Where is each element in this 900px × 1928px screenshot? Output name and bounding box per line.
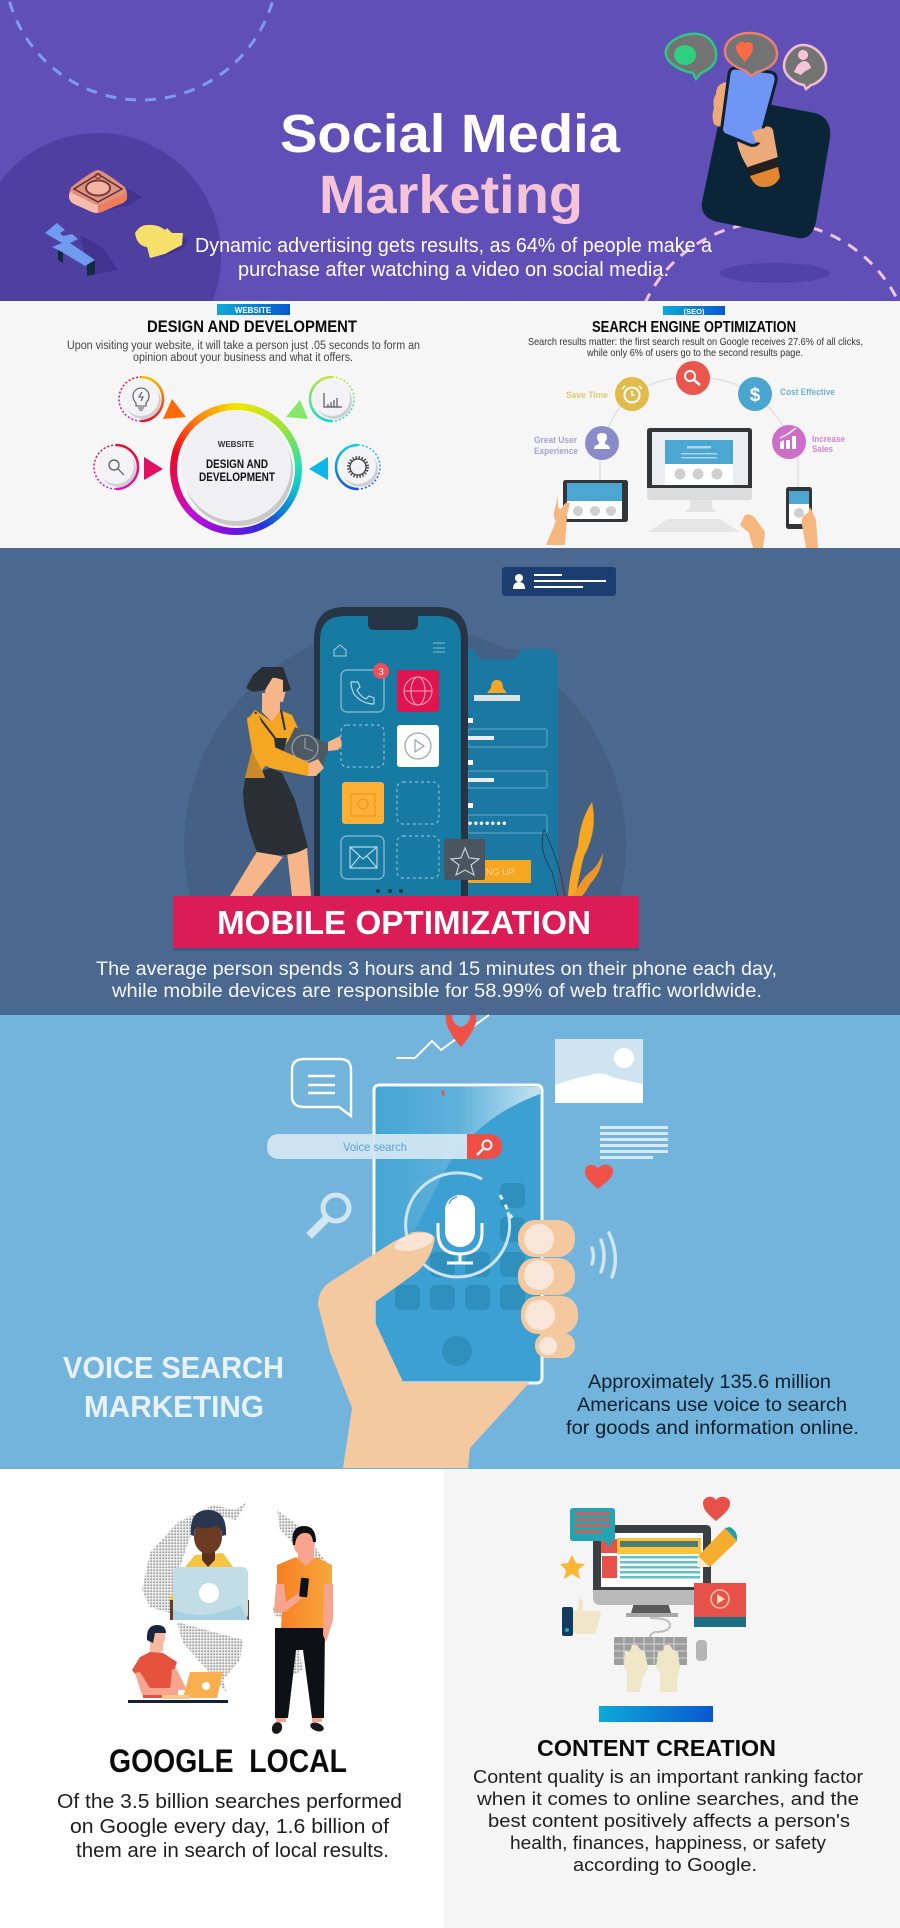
hand holding phone xyxy=(318,1220,578,1468)
chat bubble xyxy=(570,1508,615,1548)
label: cost effective: Cost Effective xyxy=(780,387,835,397)
label: increase sales: Sales xyxy=(812,444,833,454)
description: opinion about your business and what it offers. xyxy=(133,352,353,364)
icon: user badge xyxy=(585,426,619,460)
panel: design and development xyxy=(0,301,450,548)
arrow: magenta xyxy=(144,457,163,480)
tab: seo: (SEO) xyxy=(684,307,705,316)
illustration: right desk hand xyxy=(740,514,765,548)
profile badge xyxy=(502,567,616,596)
banner: mobile optimization xyxy=(173,896,639,951)
panel: search engine optimization xyxy=(450,301,900,548)
panel: content creation xyxy=(444,1469,900,1928)
panel: header xyxy=(0,0,900,301)
icon: dollar badge xyxy=(738,377,772,411)
decoration: dark circle xyxy=(0,133,221,301)
icon: magnifier node xyxy=(94,445,138,489)
woman with laptop xyxy=(169,1510,249,1620)
connector arc xyxy=(600,378,798,490)
icon: dollar badge: $ xyxy=(750,385,761,406)
description: Of the 3.5 billion searches performed xyxy=(57,1791,402,1813)
heading: DESIGN AND DEVELOPMENT xyxy=(147,317,358,336)
tab: seo xyxy=(663,306,725,316)
illustration: desktop monitor xyxy=(647,428,752,532)
app: dashed slot xyxy=(341,725,384,767)
diagram: central rainbow ring: DEVELOPMENT xyxy=(199,472,275,484)
description: according to Google. xyxy=(573,1854,757,1875)
description: when it comes to online searches, and the xyxy=(476,1788,859,1809)
heading: SEARCH ENGINE OPTIMIZATION xyxy=(592,319,796,336)
app: play xyxy=(397,725,439,767)
icon: clock badge xyxy=(615,377,649,411)
description: while mobile devices are responsible for 58.99% of web traffic worldwide. xyxy=(111,981,762,1002)
icon: magnifier xyxy=(309,1195,349,1236)
image card xyxy=(555,1039,643,1103)
description: them are in search of local results. xyxy=(76,1840,389,1862)
label: great user experience xyxy=(534,435,578,456)
video card xyxy=(694,1583,746,1627)
icon: star xyxy=(560,1555,585,1579)
monitor illustration xyxy=(593,1525,711,1617)
man with phone xyxy=(270,1526,333,1736)
back phone xyxy=(460,649,558,896)
text lines xyxy=(600,1126,668,1159)
description xyxy=(96,959,777,1002)
illustration: tablet with hand xyxy=(546,480,628,545)
description: Americans use voice to search xyxy=(577,1395,847,1416)
icon: heart xyxy=(585,1165,613,1189)
icon: instagram cube xyxy=(69,170,143,213)
description xyxy=(57,1791,402,1862)
description: health, finances, happiness, or safety xyxy=(510,1832,827,1853)
icon: yellow cloud xyxy=(135,225,188,258)
app: dashed slot xyxy=(397,782,439,824)
plant xyxy=(542,802,603,896)
description: best content positively affects a person's xyxy=(488,1810,850,1831)
app: mail xyxy=(341,836,384,879)
diagram: central rainbow ring: DESIGN AND xyxy=(206,459,268,471)
label: increase sales xyxy=(812,434,845,454)
diagram: central rainbow ring xyxy=(170,403,302,535)
arrow: green xyxy=(286,400,308,419)
keyboard and hands xyxy=(614,1618,707,1692)
icon: heart xyxy=(703,1497,730,1521)
intro text: Dynamic advertising gets results, as 64% of people make a xyxy=(195,235,713,257)
description: The average person spends 3 hours and 15 minutes on their phone each day, xyxy=(96,959,777,980)
illustration: smartphone with hand xyxy=(786,487,818,548)
line graph with pin xyxy=(396,1015,489,1058)
backdrop circle xyxy=(184,634,626,896)
app: phone xyxy=(341,663,389,712)
description: Approximately 135.6 million xyxy=(588,1372,831,1393)
description xyxy=(67,340,420,364)
front phone xyxy=(314,607,468,896)
microphone xyxy=(438,1195,482,1263)
description: on Google every day, 1.6 billion of xyxy=(70,1816,389,1838)
banner: mobile optimization: MOBILE OPTIMIZATION xyxy=(217,904,591,941)
description: Content quality is an important ranking factor xyxy=(473,1766,863,1787)
description xyxy=(473,1766,863,1875)
icon: facebook logo xyxy=(45,223,118,276)
tab: website xyxy=(217,304,290,315)
icon: sound waves xyxy=(592,1233,615,1277)
heading: CONTENT CREATION xyxy=(537,1735,776,1761)
app: shopping bag xyxy=(342,782,384,824)
panel: google local xyxy=(0,1469,444,1928)
back phone: ••••••• xyxy=(468,816,508,830)
description: for goods and information online. xyxy=(566,1418,859,1439)
back phone: NG UP xyxy=(486,867,515,877)
panel: voice search marketing xyxy=(0,1015,900,1469)
title line 2: Marketing xyxy=(319,165,583,225)
intro text xyxy=(195,235,713,281)
search bar xyxy=(267,1134,502,1159)
heading: voice search marketing: MARKETING xyxy=(84,1389,264,1424)
icon: pencil xyxy=(697,1527,737,1567)
man at laptop xyxy=(128,1625,228,1703)
intro text: purchase after watching a video on social media. xyxy=(238,259,669,281)
tab: website: WEBSITE xyxy=(235,306,272,315)
title line 1: Social Media xyxy=(280,104,621,164)
arrow: orange xyxy=(163,399,186,419)
label: save time: Save Time xyxy=(566,390,608,400)
description: Upon visiting your website, it will take a person just .05 seconds to form an xyxy=(67,340,420,352)
label: increase sales: Increase xyxy=(812,434,845,444)
label: great user experience: Great User xyxy=(534,435,577,445)
decoration: dashed arc bottom right xyxy=(644,226,897,301)
icon: magnifier badge xyxy=(676,361,710,395)
decoration: dashed arc top left xyxy=(4,0,278,100)
star tile xyxy=(444,839,485,880)
description xyxy=(566,1372,859,1439)
icon: thumbs up xyxy=(562,1599,601,1636)
heading: GOOGLE LOCAL xyxy=(109,1743,347,1779)
dotted globe xyxy=(142,1502,333,1693)
search bar: Voice search xyxy=(343,1140,407,1154)
diagram: central rainbow ring: WEBSITE xyxy=(218,440,255,449)
heading: voice search marketing xyxy=(63,1350,284,1424)
heading: voice search marketing: VOICE SEARCH xyxy=(63,1350,284,1385)
app: dashed slot xyxy=(397,836,439,878)
icon: growth badge xyxy=(772,425,806,459)
arrow: blue xyxy=(309,457,328,480)
speech bubble xyxy=(292,1059,351,1116)
description xyxy=(528,336,863,359)
icon: gear node xyxy=(336,445,380,489)
woman holding clock xyxy=(230,667,342,896)
icon: chart node xyxy=(310,377,354,421)
label: great user experience: Experience xyxy=(534,446,578,456)
phone with voice search xyxy=(374,1085,542,1383)
description: while only 6% of users go to the second results page. xyxy=(586,347,803,359)
icon: hand holding phone with reaction bubbles xyxy=(666,33,830,283)
app: globe xyxy=(397,670,439,712)
app: phone: 3 xyxy=(378,667,384,678)
panel: mobile optimization xyxy=(0,548,900,1015)
icon: light bulb node xyxy=(119,377,163,421)
gradient bar xyxy=(599,1706,713,1722)
